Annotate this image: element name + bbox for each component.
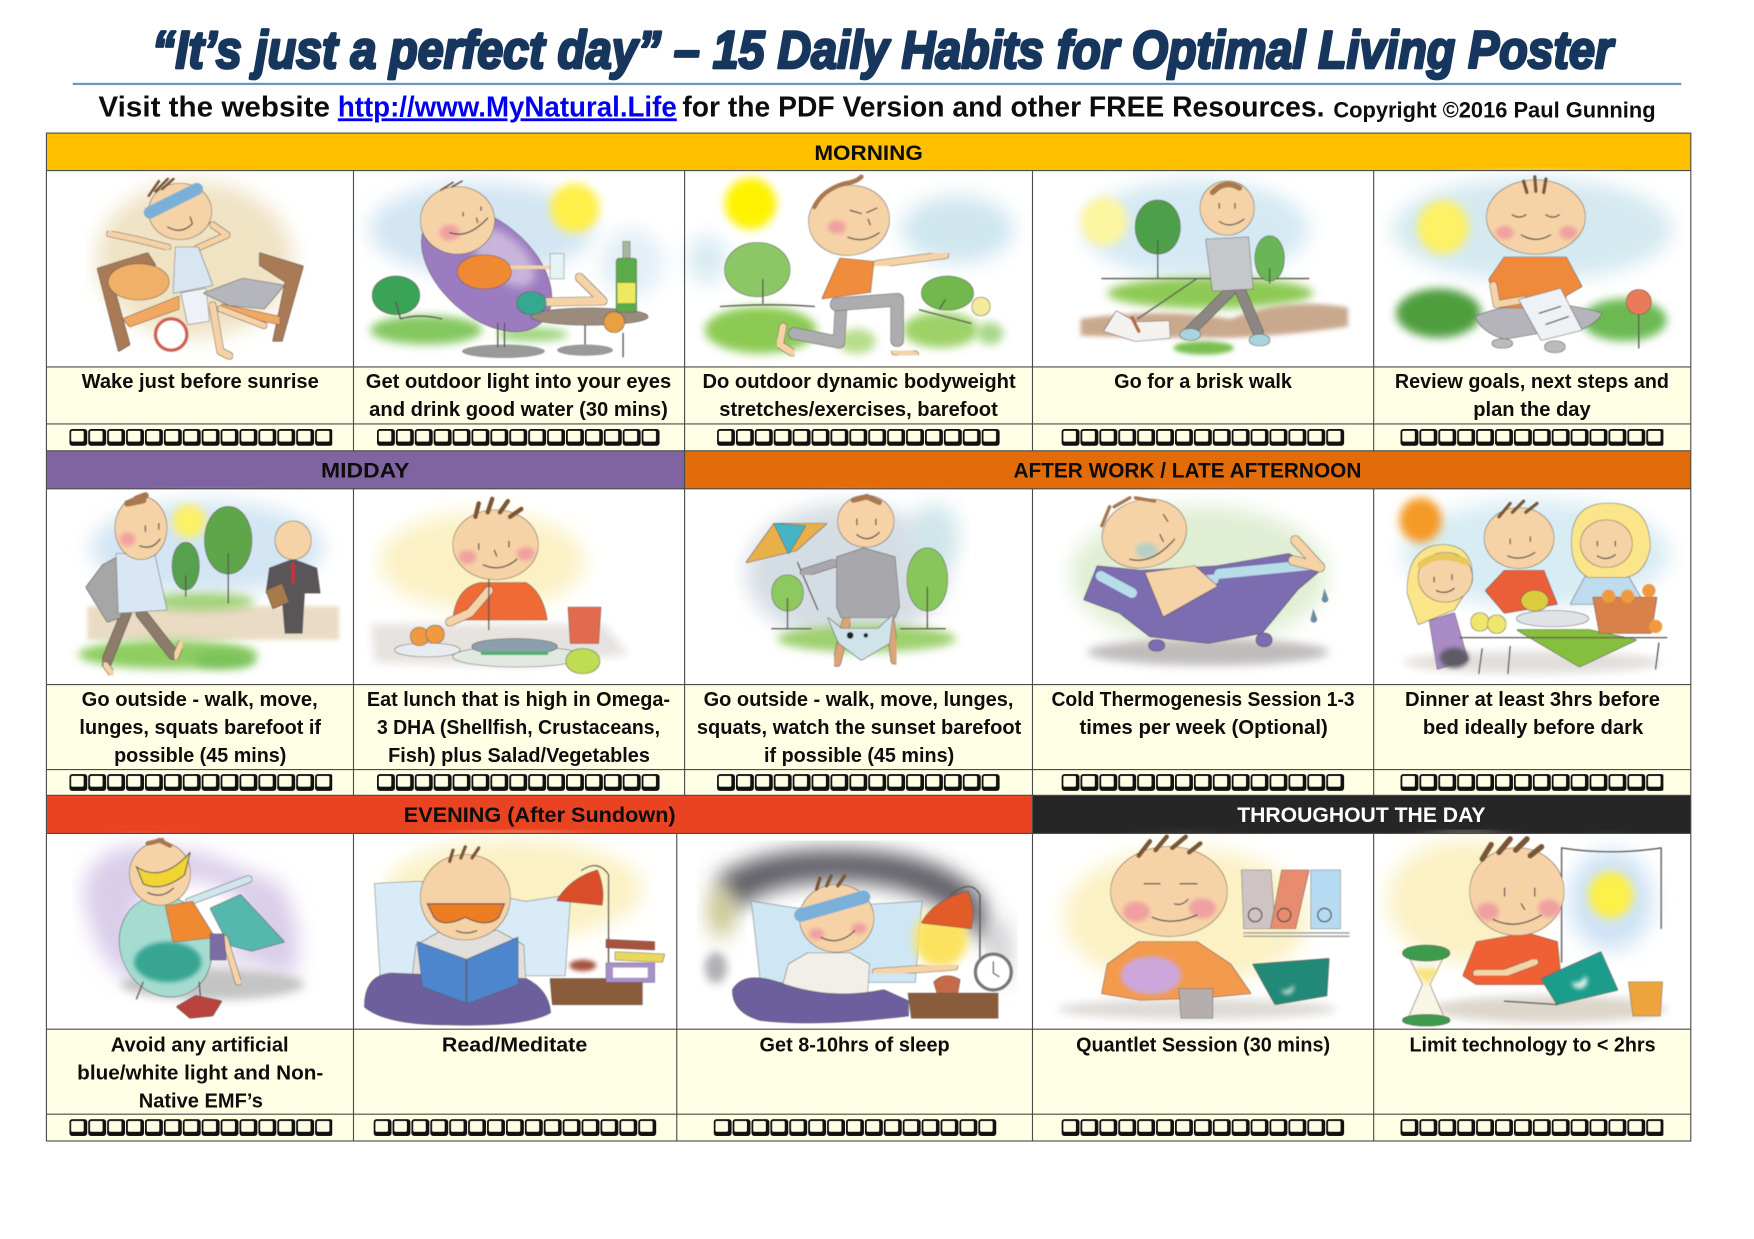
caption: plan the day	[1473, 399, 1591, 421]
caption: if possible (45 mins)	[764, 745, 954, 767]
caption	[1052, 689, 1355, 739]
subtitle line	[98, 91, 1656, 123]
check boxes	[69, 1119, 332, 1136]
caption: Quantlet Session (30 mins)	[1076, 1035, 1330, 1057]
table background	[46, 133, 1691, 1141]
caption	[697, 689, 1022, 767]
illustration: reclining chair with water	[369, 181, 663, 358]
check boxes	[717, 429, 1000, 446]
caption: Go outside - walk, move, lunges,	[704, 689, 1013, 711]
check boxes	[1401, 1119, 1663, 1136]
illustration: going to sleep	[705, 849, 1011, 1023]
habit 15: limit technology	[1387, 839, 1667, 1136]
caption	[77, 1035, 323, 1112]
heading: throughout the day: THROUGHOUT THE DAY	[1237, 803, 1486, 827]
habit 2: outdoor light	[366, 181, 671, 446]
illustration: waking in bed	[96, 179, 303, 356]
illustration: walking dog	[1081, 180, 1348, 355]
caption: Go for a brisk walk	[1114, 371, 1293, 393]
caption	[702, 371, 1016, 421]
caption: Native EMF’s	[139, 1090, 263, 1112]
caption: Go outside - walk, move,	[82, 689, 318, 711]
illustration: lunge outdoors	[687, 177, 1013, 355]
habit 13: sleep	[705, 849, 1011, 1136]
illustration: sitting with notes	[1393, 177, 1672, 352]
heading: midday	[46, 451, 685, 489]
caption	[79, 689, 321, 767]
illustration: hourglass, window and laptop	[1387, 839, 1667, 1026]
title: “It’s just a perfect day” – 15 Daily Habits for Optimal Living Poster	[152, 21, 1615, 80]
caption	[1395, 371, 1669, 421]
habit 14: quantlet session	[1057, 837, 1349, 1136]
caption: possible (45 mins)	[114, 745, 286, 767]
heading: morning	[46, 133, 1691, 171]
illustration: desk with laptop	[1057, 837, 1349, 1019]
heading: morning: MORNING	[814, 141, 923, 165]
caption: lunges, squats barefoot if	[79, 717, 321, 739]
caption: and drink good water (30 mins)	[369, 399, 668, 421]
heading: throughout the day	[1032, 795, 1691, 833]
habit 11: avoid artificial light	[69, 840, 332, 1136]
caption: stretches/exercises, barefoot	[719, 399, 998, 421]
caption: Get 8-10hrs of sleep	[760, 1035, 950, 1057]
habit 10: dinner	[1399, 498, 1670, 791]
caption: Do outdoor dynamic bodyweight	[702, 371, 1016, 393]
illustration: eating fish lunch	[371, 499, 629, 673]
caption: Review goals, next steps and	[1395, 371, 1669, 393]
heading: midday: MIDDAY	[321, 459, 409, 483]
check boxes	[374, 1119, 657, 1136]
habit 1: wake	[69, 179, 332, 446]
check boxes	[69, 774, 332, 791]
illustration: cold bath	[1071, 490, 1329, 666]
caption: Wake just before sunrise	[82, 371, 319, 393]
habit 5: review goals	[1393, 177, 1672, 446]
check boxes	[1401, 774, 1663, 791]
check boxes	[1062, 1119, 1345, 1136]
check boxes	[377, 429, 660, 446]
caption: Eat lunch that is high in Omega-	[367, 689, 670, 711]
caption: blue/white light and Non-	[77, 1062, 323, 1084]
caption	[1405, 689, 1660, 739]
caption	[366, 371, 671, 421]
habit 9: cold thermogenesis	[1052, 490, 1355, 791]
check boxes	[377, 774, 660, 791]
caption: Avoid any artificial	[111, 1035, 289, 1057]
caption: Read/Meditate	[442, 1035, 587, 1057]
illustration: family dinner	[1399, 498, 1670, 673]
caption: Get outdoor light into your eyes	[366, 371, 671, 393]
habit 12: read meditate	[365, 839, 664, 1136]
habit 8: sunset walk	[697, 496, 1022, 791]
caption: Dinner at least 3hrs before	[1405, 689, 1660, 711]
copyright: Copyright ©2016 Paul Gunning	[1333, 97, 1656, 122]
caption: squats, watch the sunset barefoot	[697, 717, 1022, 739]
heading: after work	[685, 451, 1691, 489]
habit 6: go outside midday	[69, 496, 339, 791]
check boxes	[1062, 774, 1345, 791]
habit 7: lunch	[367, 499, 670, 791]
heading: evening: EVENING (After Sundown)	[404, 803, 676, 827]
caption: bed ideally before dark	[1423, 717, 1644, 739]
check boxes	[1401, 429, 1663, 446]
illustration: walking past colleague	[78, 496, 339, 673]
habit 4: brisk walk	[1062, 180, 1348, 446]
caption: times per week (Optional)	[1079, 717, 1328, 739]
check boxes	[69, 429, 332, 446]
caption: Limit technology to < 2hrs	[1409, 1035, 1656, 1057]
website link: http://www.MyNatural.Life	[338, 91, 677, 123]
check boxes	[1062, 429, 1345, 446]
heading: after work: AFTER WORK / LATE AFTERNOON	[1013, 459, 1361, 483]
caption: Fish) plus Salad/Vegetables	[388, 745, 650, 767]
caption: Cold Thermogenesis Session 1-3	[1052, 689, 1355, 711]
illustration: reading in bed	[365, 839, 664, 1025]
caption	[367, 689, 670, 767]
caption: 3 DHA (Shellfish, Crustaceans,	[377, 717, 660, 739]
check boxes	[714, 1119, 997, 1136]
illustration: umbrella and dog	[746, 496, 959, 662]
subtitle line: for the PDF Version and other FREE Resources.	[682, 91, 1324, 123]
habit 3: stretches	[687, 177, 1016, 446]
illustration: yellow glasses in chair	[84, 840, 304, 1018]
check boxes	[717, 774, 1000, 791]
heading: evening	[46, 795, 1032, 833]
subtitle line: Visit the website	[98, 91, 330, 123]
